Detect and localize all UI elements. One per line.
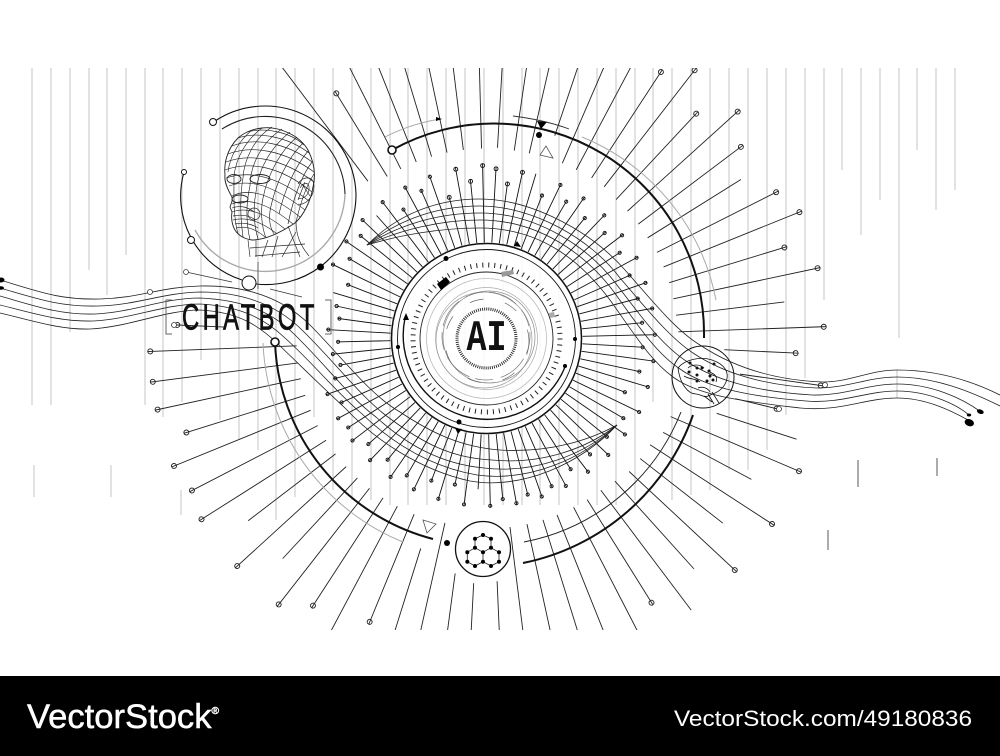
pale vertical lines bbox=[32, 68, 955, 520]
title: AI: AI bbox=[466, 314, 506, 364]
arc node markers bbox=[271, 117, 553, 546]
flowing wave bundle right from upper spiral bbox=[367, 199, 1000, 420]
arc: pale top right bbox=[582, 137, 716, 300]
arc: top right bbox=[392, 124, 704, 338]
arc: pale top left bbox=[385, 119, 440, 137]
icon: brain circuit bbox=[672, 346, 734, 408]
large arcs bbox=[263, 116, 716, 563]
footer logo text: ® bbox=[211, 706, 220, 717]
small wave nodes bbox=[148, 290, 828, 412]
arc: bottom left bbox=[275, 342, 433, 539]
CHATBOT node bbox=[172, 322, 176, 328]
short dark accent marks bbox=[828, 458, 937, 550]
panel: wireframe head bbox=[181, 106, 356, 297]
footer url text: VectorStock.com/49180836 bbox=[674, 706, 972, 731]
arc: pale left bbox=[263, 343, 403, 542]
label: CHATBOT bbox=[166, 298, 331, 338]
CHATBOT text: CHATBOT bbox=[182, 298, 318, 338]
arc: bottom right thin bbox=[524, 412, 681, 542]
head rings bbox=[181, 106, 356, 297]
icon: wave end dots bbox=[0, 278, 984, 428]
CHATBOT brackets bbox=[166, 300, 331, 334]
outer radial spokes bbox=[147, 68, 827, 630]
inner radial spokes bbox=[326, 163, 656, 507]
arc: small top marker bbox=[513, 116, 569, 129]
flowing wave bundle left into lower spiral bbox=[0, 280, 617, 483]
central hub rings bbox=[392, 241, 582, 434]
icon: molecule bbox=[456, 522, 510, 576]
footer logo text: VectorStock bbox=[27, 698, 208, 736]
footer bar bbox=[0, 676, 1000, 756]
head mesh bbox=[225, 127, 314, 257]
arc: bottom right bbox=[523, 415, 693, 563]
